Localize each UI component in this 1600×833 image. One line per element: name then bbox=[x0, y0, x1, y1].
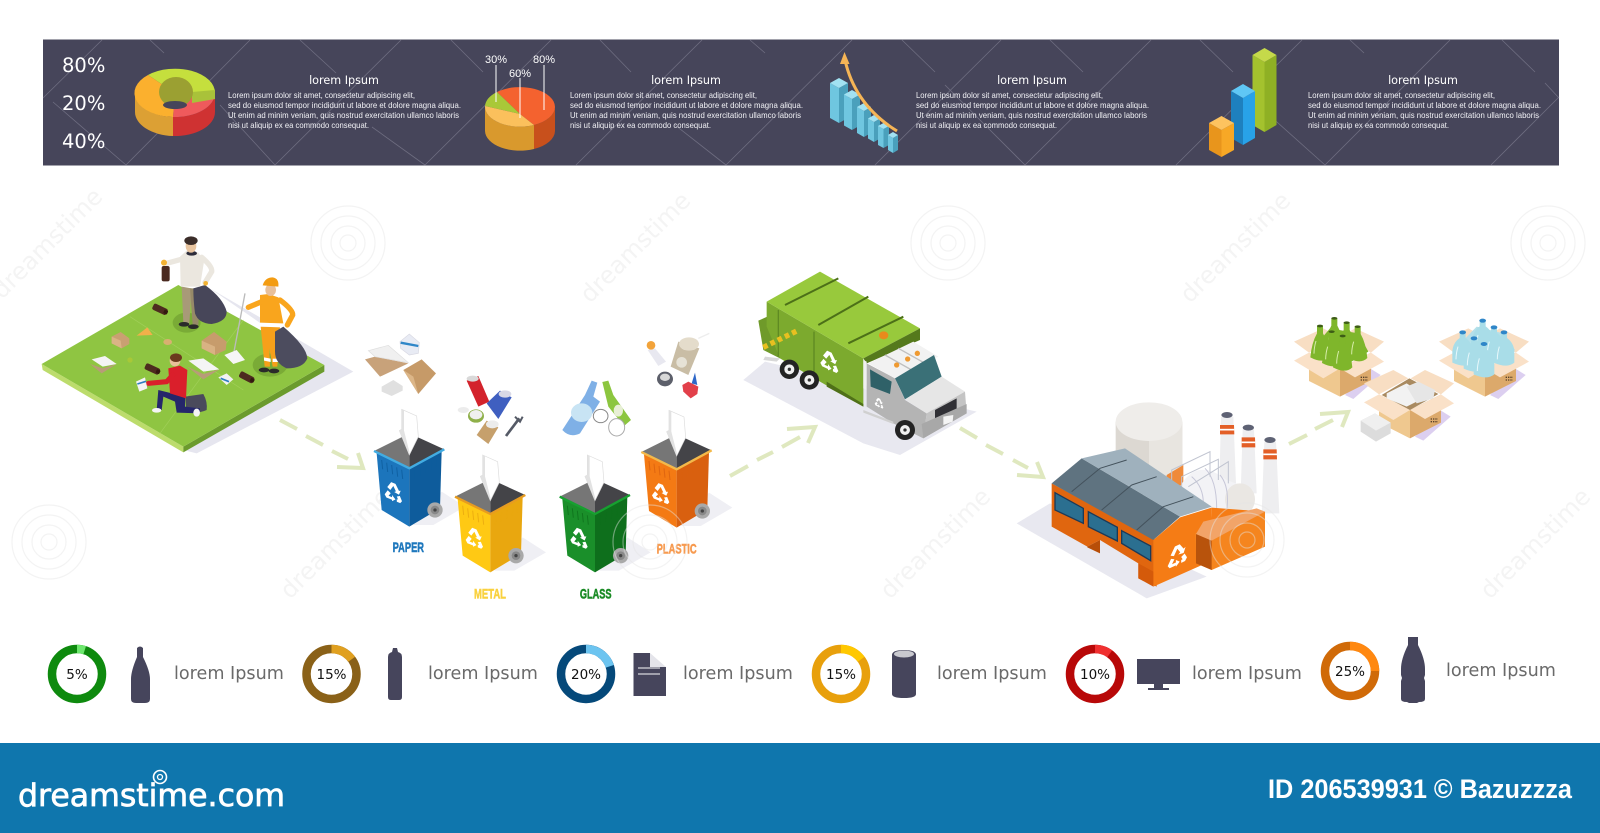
legend item: 15% drink can: 15% bbox=[826, 667, 856, 683]
heading and text block 3: sed do eiusmod tempor incididunt ut labore et dolore magna aliqua. bbox=[916, 100, 1149, 110]
paper waste bbox=[365, 334, 436, 396]
label: metal: METAL bbox=[474, 586, 506, 602]
legend item: 5% glass bottle bbox=[52, 646, 284, 703]
footer logo: dreamstime.com bbox=[18, 778, 285, 814]
percentage list: 20% bbox=[62, 92, 105, 115]
chart: descending bars with arrow bbox=[830, 52, 898, 153]
heading and text block 1: Lorem ipsum dolor sit amet, consectetur adipiscing elit, bbox=[228, 90, 415, 100]
bin: paper bbox=[374, 409, 465, 527]
heading and text block 2: nisi ut aliquip ex ea commodo consequat. bbox=[570, 120, 711, 130]
heading and text block 2: Ut enim ad minim veniam, quis nostrud exercitation ullamco laboris bbox=[570, 110, 801, 120]
label: paper: PAPER bbox=[393, 539, 424, 555]
chart: 3D donut bbox=[134, 69, 215, 136]
label: glass: GLASS bbox=[580, 586, 611, 602]
legend item: 20% document: lorem Ipsum bbox=[683, 664, 793, 684]
heading and text block 1: lorem Ipsum bbox=[309, 74, 379, 87]
heading and text block 4: lorem Ipsum bbox=[1388, 74, 1458, 87]
legend row bbox=[52, 637, 1556, 703]
paper stack beside box bbox=[1361, 413, 1391, 442]
percentage list: 40% bbox=[62, 130, 105, 153]
box: green glass bottles bbox=[1294, 317, 1384, 399]
heading and text block 2: sed do eiusmod tempor incididunt ut labore et dolore magna aliqua. bbox=[570, 100, 803, 110]
scene: recycling factory bbox=[1017, 402, 1279, 598]
chart: 3D pie bbox=[485, 54, 555, 151]
panel: top statistics bar bbox=[43, 40, 1559, 166]
percentage list: 80% bbox=[62, 54, 105, 77]
scene: people collecting litter on lawn bbox=[42, 236, 353, 453]
legend item: 5% glass bottle: 5% bbox=[66, 667, 88, 683]
glass waste bbox=[562, 381, 631, 436]
heading and text block 3: nisi ut aliquip ex ea commodo consequat. bbox=[916, 120, 1057, 130]
label: plastic: PLASTIC bbox=[657, 541, 697, 557]
arrow: truck to factory bbox=[960, 428, 1043, 477]
legend item: 15% aerosol can: lorem Ipsum bbox=[428, 664, 538, 684]
legend item: 25% plastic bottle: lorem Ipsum bbox=[1446, 661, 1556, 681]
legend item: 25% plastic bottle bbox=[1325, 637, 1556, 703]
watermark text: dreamstime bbox=[1174, 187, 1296, 308]
legend item: 10% monitor bbox=[1070, 649, 1302, 699]
heading and text block 3: Lorem ipsum dolor sit amet, consectetur adipiscing elit, bbox=[916, 90, 1103, 100]
chart: 3D pie: 80% bbox=[533, 54, 555, 66]
watermark text: dreamstime bbox=[1474, 483, 1596, 604]
arrow: bins to truck bbox=[730, 427, 815, 476]
heading and text block 1 bbox=[228, 74, 461, 130]
heading and text block 1: Ut enim ad minim veniam, quis nostrud exercitation ullamco laboris bbox=[228, 110, 459, 120]
chart: three isometric bars bbox=[1209, 48, 1276, 157]
heading and text block 1: sed do eiusmod tempor incididunt ut labore et dolore magna aliqua. bbox=[228, 100, 461, 110]
figure: man holding bottle with bag bbox=[161, 236, 227, 333]
heading and text block 3: lorem Ipsum bbox=[997, 74, 1067, 87]
drum conveyor bbox=[1167, 452, 1255, 515]
heading and text block 3: Ut enim ad minim veniam, quis nostrud exercitation ullamco laboris bbox=[916, 110, 1147, 120]
chart: 3D pie: 30% bbox=[485, 54, 507, 66]
chart: 3D pie: 60% bbox=[509, 68, 531, 80]
watermark text: dreamstime bbox=[574, 187, 696, 308]
storage tank bbox=[1116, 402, 1182, 480]
chimneys bbox=[1219, 412, 1279, 513]
heading and text block 4: Lorem ipsum dolor sit amet, consectetur adipiscing elit, bbox=[1308, 90, 1495, 100]
bin: metal bbox=[455, 455, 546, 572]
legend item: 15% drink can bbox=[816, 649, 1047, 699]
bin: glass bbox=[560, 455, 651, 572]
legend item: 20% document bbox=[561, 649, 793, 699]
footer credit: ID 206539931 © Bazuzzza bbox=[1268, 774, 1573, 804]
heading and text block 2 bbox=[570, 74, 803, 130]
legend item: 20% document: 20% bbox=[571, 667, 601, 683]
scene: sorting bins with waste bbox=[365, 333, 732, 602]
scene: recycled goods in boxes bbox=[1294, 317, 1529, 442]
watermark text: dreamstime bbox=[274, 483, 396, 604]
legend item: 15% drink can: lorem Ipsum bbox=[937, 664, 1047, 684]
arrow: factory to recycled goods bbox=[1289, 412, 1348, 444]
heading and text block 4 bbox=[1308, 74, 1541, 130]
watermark text bbox=[0, 183, 1596, 604]
box: paper stacks bbox=[1364, 370, 1454, 441]
arrow: lawn to bins bbox=[280, 420, 363, 468]
litter on the lawn bbox=[90, 303, 256, 385]
heading and text block 4: nisi ut aliquip ex ea commodo consequat. bbox=[1308, 120, 1449, 130]
heading and text block 2: Lorem ipsum dolor sit amet, consectetur adipiscing elit, bbox=[570, 90, 757, 100]
figure: worker in orange with bag and picker bbox=[224, 277, 307, 377]
factory building bbox=[1052, 448, 1265, 587]
heading and text block 2: lorem Ipsum bbox=[651, 74, 721, 87]
footer band bbox=[0, 743, 1600, 833]
heading and text block 1: nisi ut aliquip ex ea commodo consequat. bbox=[228, 120, 369, 130]
scene: garbage truck bbox=[743, 272, 977, 455]
legend item: 5% glass bottle: lorem Ipsum bbox=[174, 664, 284, 684]
legend item: 10% monitor: 10% bbox=[1080, 667, 1110, 683]
box: plastic bottles bbox=[1439, 319, 1529, 399]
heading and text block 3 bbox=[916, 74, 1149, 130]
legend item: 15% aerosol can: 15% bbox=[316, 667, 347, 683]
plastic waste bbox=[647, 333, 709, 398]
metal waste bbox=[458, 376, 523, 444]
bin: plastic bbox=[641, 410, 732, 528]
legend item: 15% aerosol can bbox=[306, 648, 538, 700]
figure: kneeling man in red bbox=[136, 353, 207, 417]
legend item: 25% plastic bottle: 25% bbox=[1335, 664, 1365, 680]
legend item: 10% monitor: lorem Ipsum bbox=[1192, 664, 1302, 684]
watermark text: dreamstime bbox=[874, 483, 996, 604]
heading and text block 4: Ut enim ad minim veniam, quis nostrud exercitation ullamco laboris bbox=[1308, 110, 1539, 120]
percentage list bbox=[62, 54, 105, 153]
watermark rosettes bbox=[12, 206, 1585, 579]
heading and text block 4: sed do eiusmod tempor incididunt ut labore et dolore magna aliqua. bbox=[1308, 100, 1541, 110]
